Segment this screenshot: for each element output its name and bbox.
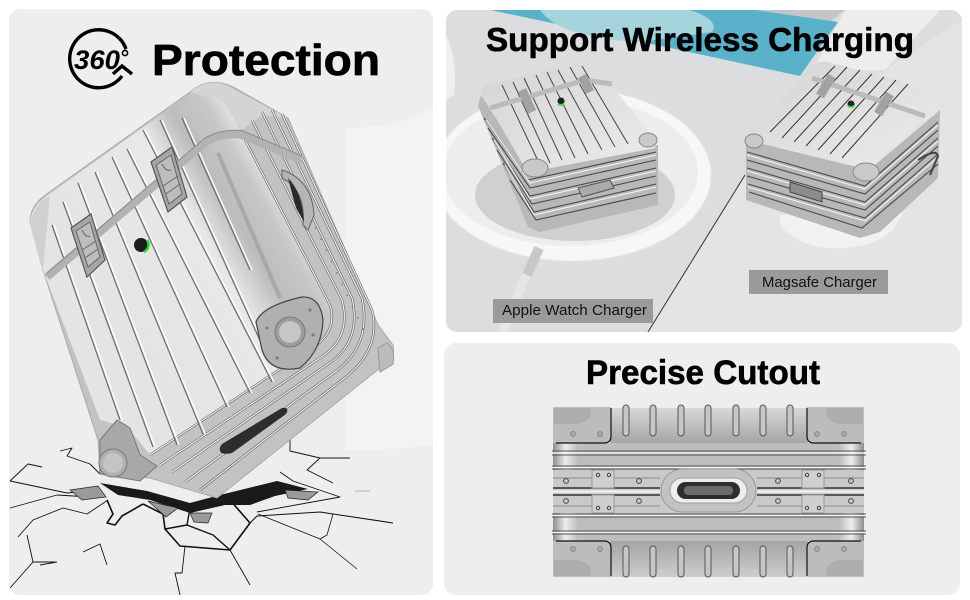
corner plate with wheel: [256, 297, 323, 369]
ground cracks: [10, 439, 393, 595]
upper body: [610, 408, 808, 444]
label: Apple Watch Charger: Apple Watch Charger: [502, 302, 647, 319]
panel: precise cutout: [444, 343, 960, 595]
middle rails: [553, 443, 864, 541]
label: Magsafe Charger: [749, 270, 888, 294]
corner guards: [553, 407, 864, 577]
suitcase ribs: [52, 118, 272, 447]
rivet plates: [592, 470, 824, 513]
heading: Protection: Protection: [152, 36, 380, 85]
label: Magsafe Charger: Magsafe Charger: [762, 274, 877, 291]
suitcase strap band: [47, 134, 302, 277]
suitcase on watch charger: [478, 62, 658, 232]
bottom-left corner wheel: [99, 420, 157, 481]
suitcase on magsafe charger: [745, 61, 940, 238]
floor seam: [648, 20, 962, 332]
bottom grab handle: [220, 408, 287, 454]
heading: Support Wireless Charging: Support Wireless Charging: [486, 21, 914, 58]
illustration: tilted suitcase: [30, 82, 394, 498]
side and bottom ridges: [150, 110, 374, 490]
wheel upper right: [378, 343, 394, 372]
illustration: suitcase end view: [552, 405, 866, 577]
charging disc: [433, 89, 711, 332]
ribs: [623, 405, 793, 577]
latch right: [151, 147, 187, 212]
charging port cutout: [661, 469, 756, 512]
suitcase front face: [30, 86, 332, 455]
icon: 360 degree arrow: 360: [74, 45, 120, 75]
latch left: [71, 214, 105, 277]
panel: wireless charging: [433, 10, 962, 332]
pool water: [490, 10, 838, 76]
icon: 360 degree arrow: [70, 30, 132, 88]
lower body: [610, 541, 808, 577]
crack hole: [100, 481, 308, 513]
suitcase silhouette: [30, 82, 393, 498]
panel: 360 protection: [9, 9, 433, 595]
lock indicator: [134, 238, 149, 252]
label: Apple Watch Charger: [493, 299, 653, 323]
side handle: [282, 170, 314, 230]
magsafe puck: [780, 212, 902, 248]
heading: Precise Cutout: Precise Cutout: [586, 354, 820, 392]
